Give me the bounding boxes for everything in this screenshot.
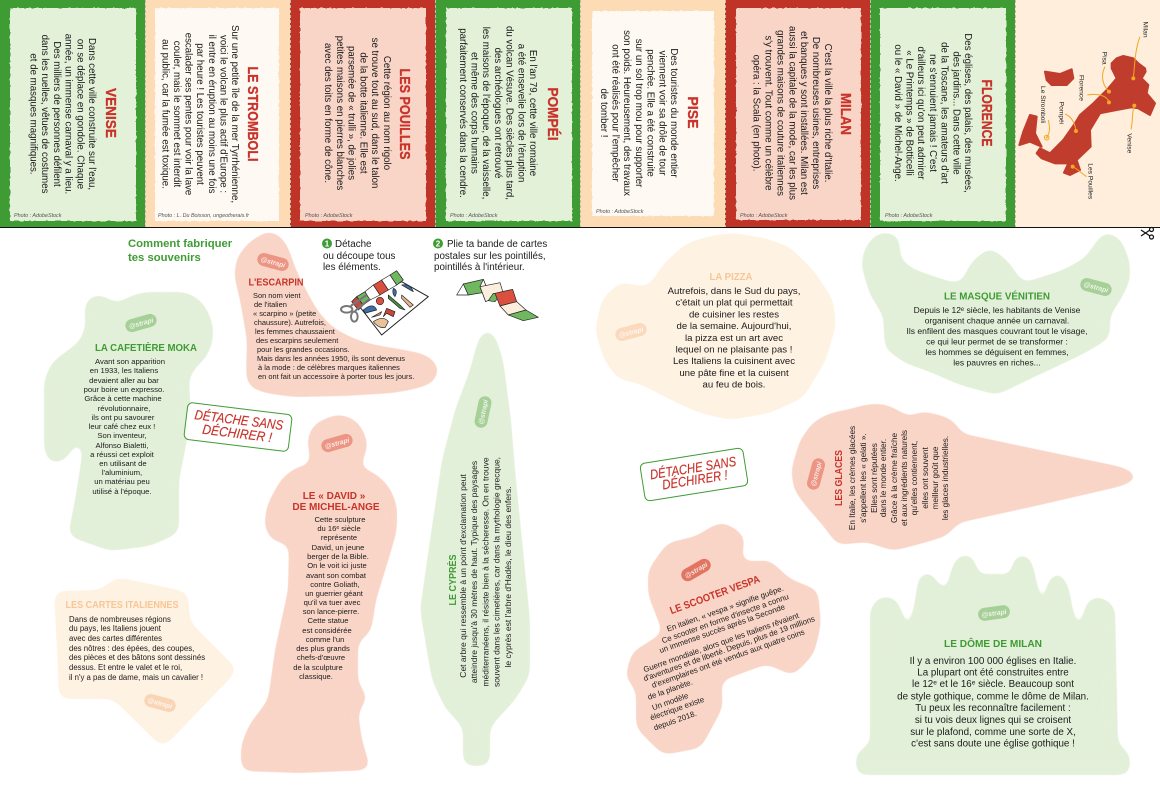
card text: C'est la ville la plus riche d'Italie. [822, 44, 833, 182]
card text: escalader ses pentes pour voir la lave [183, 33, 194, 195]
panel text: Grâce à cette machine [84, 394, 162, 403]
card title: MILAN [837, 93, 854, 135]
panel text: une pâte fine et la cuisent [679, 368, 789, 379]
panel text: méditerranéens, il résiste bien à la sécheresse. On en trouve [480, 457, 490, 687]
panel text: de la planète. [646, 678, 694, 702]
step 1 text: ou découpe tous [323, 251, 396, 262]
panel text: ce qui leur permet de se transformer : [926, 336, 1068, 346]
logo: @strapi [128, 317, 154, 331]
card title: VENISE [102, 88, 119, 138]
panel text: La plupart ont été construites entre [917, 668, 1069, 678]
logo: @strapi [324, 437, 350, 451]
card text: son poids. Heureusement, des travaux [621, 30, 632, 196]
photo credit: Photo : AdobeStock [740, 213, 788, 219]
step 1 [322, 238, 396, 273]
card text: ou le « David » de Michel-Ange. [892, 44, 903, 182]
panel text: au feu de bois. [703, 380, 765, 391]
card text: viennent voir sa drôle de tour [656, 51, 667, 176]
card text: dans les ruelles, vêtues de costumes [39, 35, 50, 194]
map of Italy [1019, 22, 1155, 200]
card text: opéra : la Scala (en photo). [751, 55, 762, 171]
panel text: les pauvres en riches... [953, 358, 1041, 368]
logo: @strapi [684, 561, 709, 580]
logo [256, 252, 290, 272]
card text: parsemée de « trulli », de jolies [346, 46, 357, 180]
logo: @strapi [1083, 281, 1109, 295]
panel text: Ils enfilent des masques couvrant tout le visage, [907, 326, 1087, 336]
panel text: le 12ᵉ et le 16ᵉ siècle. Beaucoup sont [912, 679, 1074, 690]
Sardinia [1045, 69, 1073, 85]
panel text: en utilisant de [99, 459, 147, 468]
card text: les maisons de l'époque, de la vaisselle, [480, 27, 491, 199]
map labels: Florence [1077, 75, 1084, 101]
card text: sur un sol trop mou pour supporter [633, 39, 644, 188]
icon: step number 2: 2 [436, 240, 441, 248]
panel: la pizza [595, 233, 836, 420]
logo [143, 693, 177, 713]
card text: grandes maisons de couture italiennes [774, 30, 785, 196]
card text: a été ensevelie lors de l'éruption [515, 44, 526, 182]
panel text: il n'y a pas de dame, mais un cavalier ! [69, 673, 203, 682]
step 2 text: Plie ta bande de cartes [447, 239, 547, 250]
card text: Des touristes du monde entier [668, 48, 679, 178]
card title: POMPÉI [544, 88, 561, 140]
panel text: Dans de nombreuses régions [69, 615, 171, 624]
logo: @strapi [478, 399, 490, 425]
panel text: Ce scooter en forme d'insecte a connu [660, 592, 790, 645]
panel text: organisent chaque année un carnaval. [925, 316, 1069, 326]
map labels: Venise [1126, 133, 1133, 154]
panel text: Il y a environ 100 000 églises en Italie. [910, 656, 1076, 667]
step 2 [433, 238, 547, 273]
photo credit: Photo : L. Du Boisson, ungeotherais.fr [158, 213, 249, 219]
panel: la cafetière Moka [44, 292, 213, 551]
card text: et même des corps humains [468, 52, 480, 174]
icon: step number 1: 1 [325, 240, 330, 248]
card: Milan [736, 8, 861, 220]
panel text: des pièces et des bâtons sont dessinés [69, 653, 205, 662]
panel text: le cyprès est l'arbre d'Hadès, le dieu des enfers. [503, 487, 513, 667]
card text: En l'an 79, cette ville romaine [527, 50, 538, 176]
panel text: Grâce à la crème fraîche [890, 433, 899, 523]
card text: par heure ! Les touristes peuvent [194, 43, 205, 185]
card text: d'ailleurs ici qu'on peut admirer [915, 47, 926, 180]
panel text: depuis 2018. [652, 709, 698, 732]
card text: des jardins... Dans cette ville [950, 51, 961, 175]
stamp: détache sans déchirer 2: DÉTACHE SANS [649, 454, 737, 482]
panel text: des plus grands [296, 644, 350, 653]
logo: @strapi [260, 256, 286, 270]
card text: avec des toits en forme de cône. [322, 43, 333, 183]
card text: parfaitement conservés dans la cendre. [457, 28, 468, 198]
stamp: détache sans déchirer 2 [640, 448, 748, 501]
heading: how to make souvenirs: Comment fabriquer [128, 238, 233, 250]
panel: le dôme de Milan [856, 555, 1130, 775]
stamp: détache sans déchirer 1: DÉCHIRER ! [202, 422, 273, 445]
panel text: Avant son apparition [95, 357, 165, 366]
card text: ne s'ennuient jamais ! C'est [927, 54, 938, 172]
panel text: chaussure). Autrefois, [254, 318, 326, 327]
card: Venise [10, 8, 136, 221]
panel text: En italien, « vespa » signifie guêpe. [665, 584, 785, 633]
stamp: détache sans déchirer 1: DÉTACHE SANS [194, 407, 284, 433]
panel text: « scarpino » (petite [253, 309, 316, 318]
card: Les Pouilles [300, 8, 426, 221]
panel text: dessus. Et entre le valet et le roi, [69, 663, 182, 672]
panel: les glaces [791, 404, 1142, 551]
logo [806, 457, 826, 491]
heading: how to make souvenirs: tes souvenirs [128, 252, 201, 264]
panel text: les hommes se déguisent en femmes, [925, 347, 1069, 357]
panel text: des nôtres : des épées, des coupes, [69, 644, 194, 653]
postcard strip background [0, 0, 1160, 228]
panel title: LA CAFETIÈRE MOKA [95, 341, 197, 354]
card title: LES POUILLES [396, 68, 413, 160]
panel text: un matériau peu [94, 477, 150, 486]
panel text: berger de la Bible. [307, 552, 369, 561]
panel text: On le voit ici juste [307, 561, 367, 570]
card text: on se déplace en gondole. Chaque [74, 39, 85, 189]
panel text: les femmes chaussaient [255, 327, 336, 336]
panel text: leur café chez eux ! [89, 422, 155, 431]
panel: le cyprès [420, 327, 530, 766]
panel text: son lance-pierre. [303, 607, 359, 616]
panel title: L'ESCARPIN [248, 276, 304, 288]
panel text: qu'elles contiennent, [910, 441, 919, 515]
panel text: du pays, les Italiens jouent [69, 624, 162, 633]
panel text: chefs-d'œuvre [297, 653, 345, 662]
panel title: LE SCOOTER VESPA [668, 573, 762, 617]
illustration: cut-out sheet and scissors [341, 271, 428, 335]
panel text [642, 584, 816, 732]
card text: petites maisons en pierres blanches [334, 36, 345, 190]
card text: s'y trouvent. Tout comme un célèbre [762, 35, 774, 191]
card text: il entre en éruption au moins une fois [206, 35, 217, 194]
card text: penchée. Elle a été construite [645, 49, 656, 177]
logo: @strapi [981, 609, 1007, 619]
logo: @strapi [810, 461, 824, 487]
card: Pompéi [446, 8, 572, 221]
panel text: c'est sans doute une église gothique ! [911, 738, 1075, 750]
panel title: DE MICHEL-ANGE [292, 502, 380, 513]
panel text: David, un jeune [312, 543, 364, 552]
map labels: Pompéi [1057, 102, 1064, 125]
panel text: un guerrier géant [305, 589, 364, 598]
panel title: LE MASQUE VÉNITIEN [944, 290, 1050, 302]
panel text: si tu vois deux lignes qui se croisent [915, 715, 1071, 726]
panel text: comme l'un [306, 635, 344, 644]
card text: et banques y sont installées. Milan est [798, 31, 809, 195]
panel: le scooter Vespa [625, 522, 821, 755]
photo credit: Photo : AdobeStock [14, 213, 62, 219]
card: Le Stromboli [155, 8, 279, 221]
icon: scissors [1141, 228, 1154, 239]
logo: @strapi [618, 326, 644, 340]
panel text: est considérée [302, 626, 352, 635]
card text: des archéologues ont retrouvé [492, 48, 503, 178]
card text: ont été réalisés pour l'empêcher [610, 44, 620, 183]
card text: couler, mais le sommet est interdit [171, 41, 182, 188]
step 2 text: postales sur les pointillés, [434, 251, 546, 262]
card text: Dans cette ville construite sur l'eau, [86, 38, 97, 190]
panel: le masque vénitien [861, 231, 1130, 395]
panel text: Alfonso Bialetti, [96, 441, 148, 450]
panel: l'escarpin [234, 231, 439, 397]
card text: et de masques magnifiques. [28, 53, 38, 175]
photo credit: Photo : AdobeStock [596, 209, 644, 215]
map labels: Les Pouilles [1086, 163, 1093, 200]
panel text: Mais dans les années 1950, ils sont devenus [257, 354, 405, 363]
panel text: Son inventeur, [97, 431, 147, 440]
card text: Cette région au nom rigolo [381, 56, 392, 170]
panel text: atteindre jusqu'à 30 mètres de haut. Typique des paysages [469, 461, 479, 683]
card text: au public, car la fumée est toxique. [159, 39, 170, 189]
card text: se trouve tout au sud, dans le talon [369, 38, 380, 188]
panel text: Cette sculpture [314, 515, 366, 524]
card title: PISE [684, 96, 701, 128]
panel text: un immense succès après la Seconde [658, 602, 787, 655]
panel text: de cuisiner les restes [689, 309, 779, 320]
panel text: elles ont souvent [921, 447, 930, 509]
panel text: utilisé à l'époque. [92, 487, 152, 496]
panel text: de l'italien [254, 300, 287, 309]
logo [614, 322, 648, 342]
Sicily [1019, 115, 1042, 147]
panel text: révolutionnaire, [98, 404, 150, 413]
panel text: Depuis le 12ᵉ siècle, les habitants de Venise [914, 305, 1081, 315]
panel text: de style gothique, comme le dôme de Milan. [897, 692, 1089, 702]
panel text: et aux ingrédients naturels [900, 430, 909, 526]
panel text: représente [321, 533, 357, 542]
card title: LE STROMBOLI [244, 66, 261, 162]
panel text: Les Italiens la cuisinent avec [673, 356, 795, 367]
panel: le David de Michel-Ange [241, 414, 397, 773]
logo [124, 312, 158, 334]
panel text: du 16ᵉ siècle [317, 524, 361, 533]
panel text: contre Goliath, [310, 580, 360, 589]
panel text: qu'il va tuer avec [304, 598, 361, 607]
panel title: LE DÔME DE MILAN [944, 637, 1042, 650]
panel title: LES GLACES [833, 450, 845, 506]
panel text: pour les grandes occasions. [257, 345, 350, 354]
stamp: détache sans déchirer 1 [184, 402, 292, 452]
panel text: Elles sont réputées [870, 443, 879, 513]
panel text: meilleur goût que [931, 446, 940, 509]
photo credit: Photo : AdobeStock [885, 213, 933, 219]
map labels: Milan [1142, 22, 1149, 38]
step 1 text: les éléments. [323, 262, 381, 273]
card text: année, un immense carnaval y a lieu. [63, 34, 74, 194]
panel text: dans le monde entier. [879, 439, 888, 517]
panel text: en 1933, les Italiens [90, 366, 158, 375]
map labels [1039, 22, 1149, 200]
photo credit: Photo : AdobeStock [305, 213, 353, 219]
map dots [1046, 76, 1136, 169]
panel text: les glaces industrielles. [941, 436, 950, 520]
panel text: En Italie, les crèmes glacées [848, 426, 857, 530]
stamp: détache sans déchirer 2: DÉCHIRER ! [661, 467, 729, 493]
card: Pise [592, 11, 714, 216]
panel title: LE CYPRÈS [446, 554, 459, 606]
card text: de la Toscane, les amateurs d'art [939, 42, 950, 184]
panel text: c'était un plat qui permettait [675, 298, 793, 309]
panel text: classique. [299, 672, 333, 681]
illustration: folded postcard strip [457, 279, 538, 321]
card text: de tomber ! [598, 88, 609, 138]
map labels: Pisa [1101, 52, 1108, 65]
panel text: d'aventures et de liberté. Depuis, plus de 19 millions [642, 614, 816, 683]
panel text: en ont fait un accessoire à porter tous les jours. [258, 372, 414, 381]
panel text: pour boire un expresso. [84, 385, 164, 394]
panel text: sur le plafond, comme une sorte de X, [910, 727, 1076, 738]
panel text: avant son combat [306, 571, 367, 580]
panel text: lequel on ne plaisante pas ! [676, 344, 792, 356]
panel text: avec des cartes différentes [69, 634, 162, 643]
panel title: LES CARTES ITALIENNES [66, 599, 178, 611]
panel: les cartes italiennes [54, 577, 238, 748]
card text: voici le volcan le plus actif d'Europe : [217, 35, 228, 193]
card text: Des églises, des palais, des musées, [962, 33, 973, 193]
logo [473, 395, 493, 429]
panel text: la pizza est un art avec [685, 333, 783, 344]
panel text: Tu peux les reconnaître facilement : [915, 703, 1071, 714]
step 2 text: pointillés à l'intérieur. [434, 262, 525, 273]
panel text: souvent dans les cimetières, car dans la mythologie grecque, [492, 457, 502, 687]
panel text: s'appellent les « gelati ». [859, 433, 868, 523]
card: Florence [880, 8, 1006, 221]
panel title: LE « DAVID » [303, 491, 366, 502]
panel text: de la semaine. Aujourd'hui, [677, 321, 791, 332]
panel text: Son nom vient [253, 291, 301, 300]
panel text: à la mode : de célèbres marques italiennes [258, 363, 400, 372]
panel text: des escarpins seulement [256, 336, 339, 345]
panel text: Cet arbre qui ressemble à un point d'exclamation peut [458, 474, 468, 678]
card text: aussi la capitale de la mode, car les plus [786, 26, 797, 200]
step 1 text: Détache [335, 239, 372, 250]
panel text: Cette statue [308, 616, 348, 625]
logo [320, 432, 354, 454]
logo: @strapi [147, 697, 173, 711]
panel text: l'aluminium, [102, 468, 142, 477]
panel title: LA PIZZA [710, 271, 753, 283]
map leaders [1044, 37, 1140, 177]
card text: du volcan Vésuve. Des siècles plus tard, [504, 26, 515, 200]
photo credit: Photo : AdobeStock [450, 213, 498, 219]
panel text: de la sculpture [293, 663, 343, 672]
card text: « Le Printemps » de Botticelli [904, 50, 914, 176]
card text: Des milliers de personnes défilent [51, 41, 62, 187]
map labels: Le Stromboli [1039, 86, 1046, 124]
card title: FLORENCE [978, 80, 995, 146]
mainland [1037, 56, 1155, 175]
card text: De nombreuses usines, entreprises [810, 37, 821, 189]
logo [977, 604, 1011, 622]
panel text: Un modèle [651, 691, 690, 712]
panel text: ils ont pu savourer [92, 413, 155, 422]
logo [679, 556, 713, 584]
panel text: Autrefois, dans le Sud du pays, [668, 286, 800, 297]
card text: Sur une petite île de la mer Tyrrhénienne, [229, 25, 240, 203]
card text: de la botte italienne. Elle est [357, 52, 368, 174]
panel text: a réussi cet exploit [90, 450, 155, 459]
panel text: électrique existe [649, 695, 706, 722]
panel text: devaient aller au bar [89, 376, 159, 385]
panel text: Guerre mondiale, alors que les Italiens rêvaient [642, 611, 801, 674]
logo [1079, 277, 1113, 297]
panel text: d'exemplaires ont été vendus aux quatre coins [651, 627, 806, 690]
